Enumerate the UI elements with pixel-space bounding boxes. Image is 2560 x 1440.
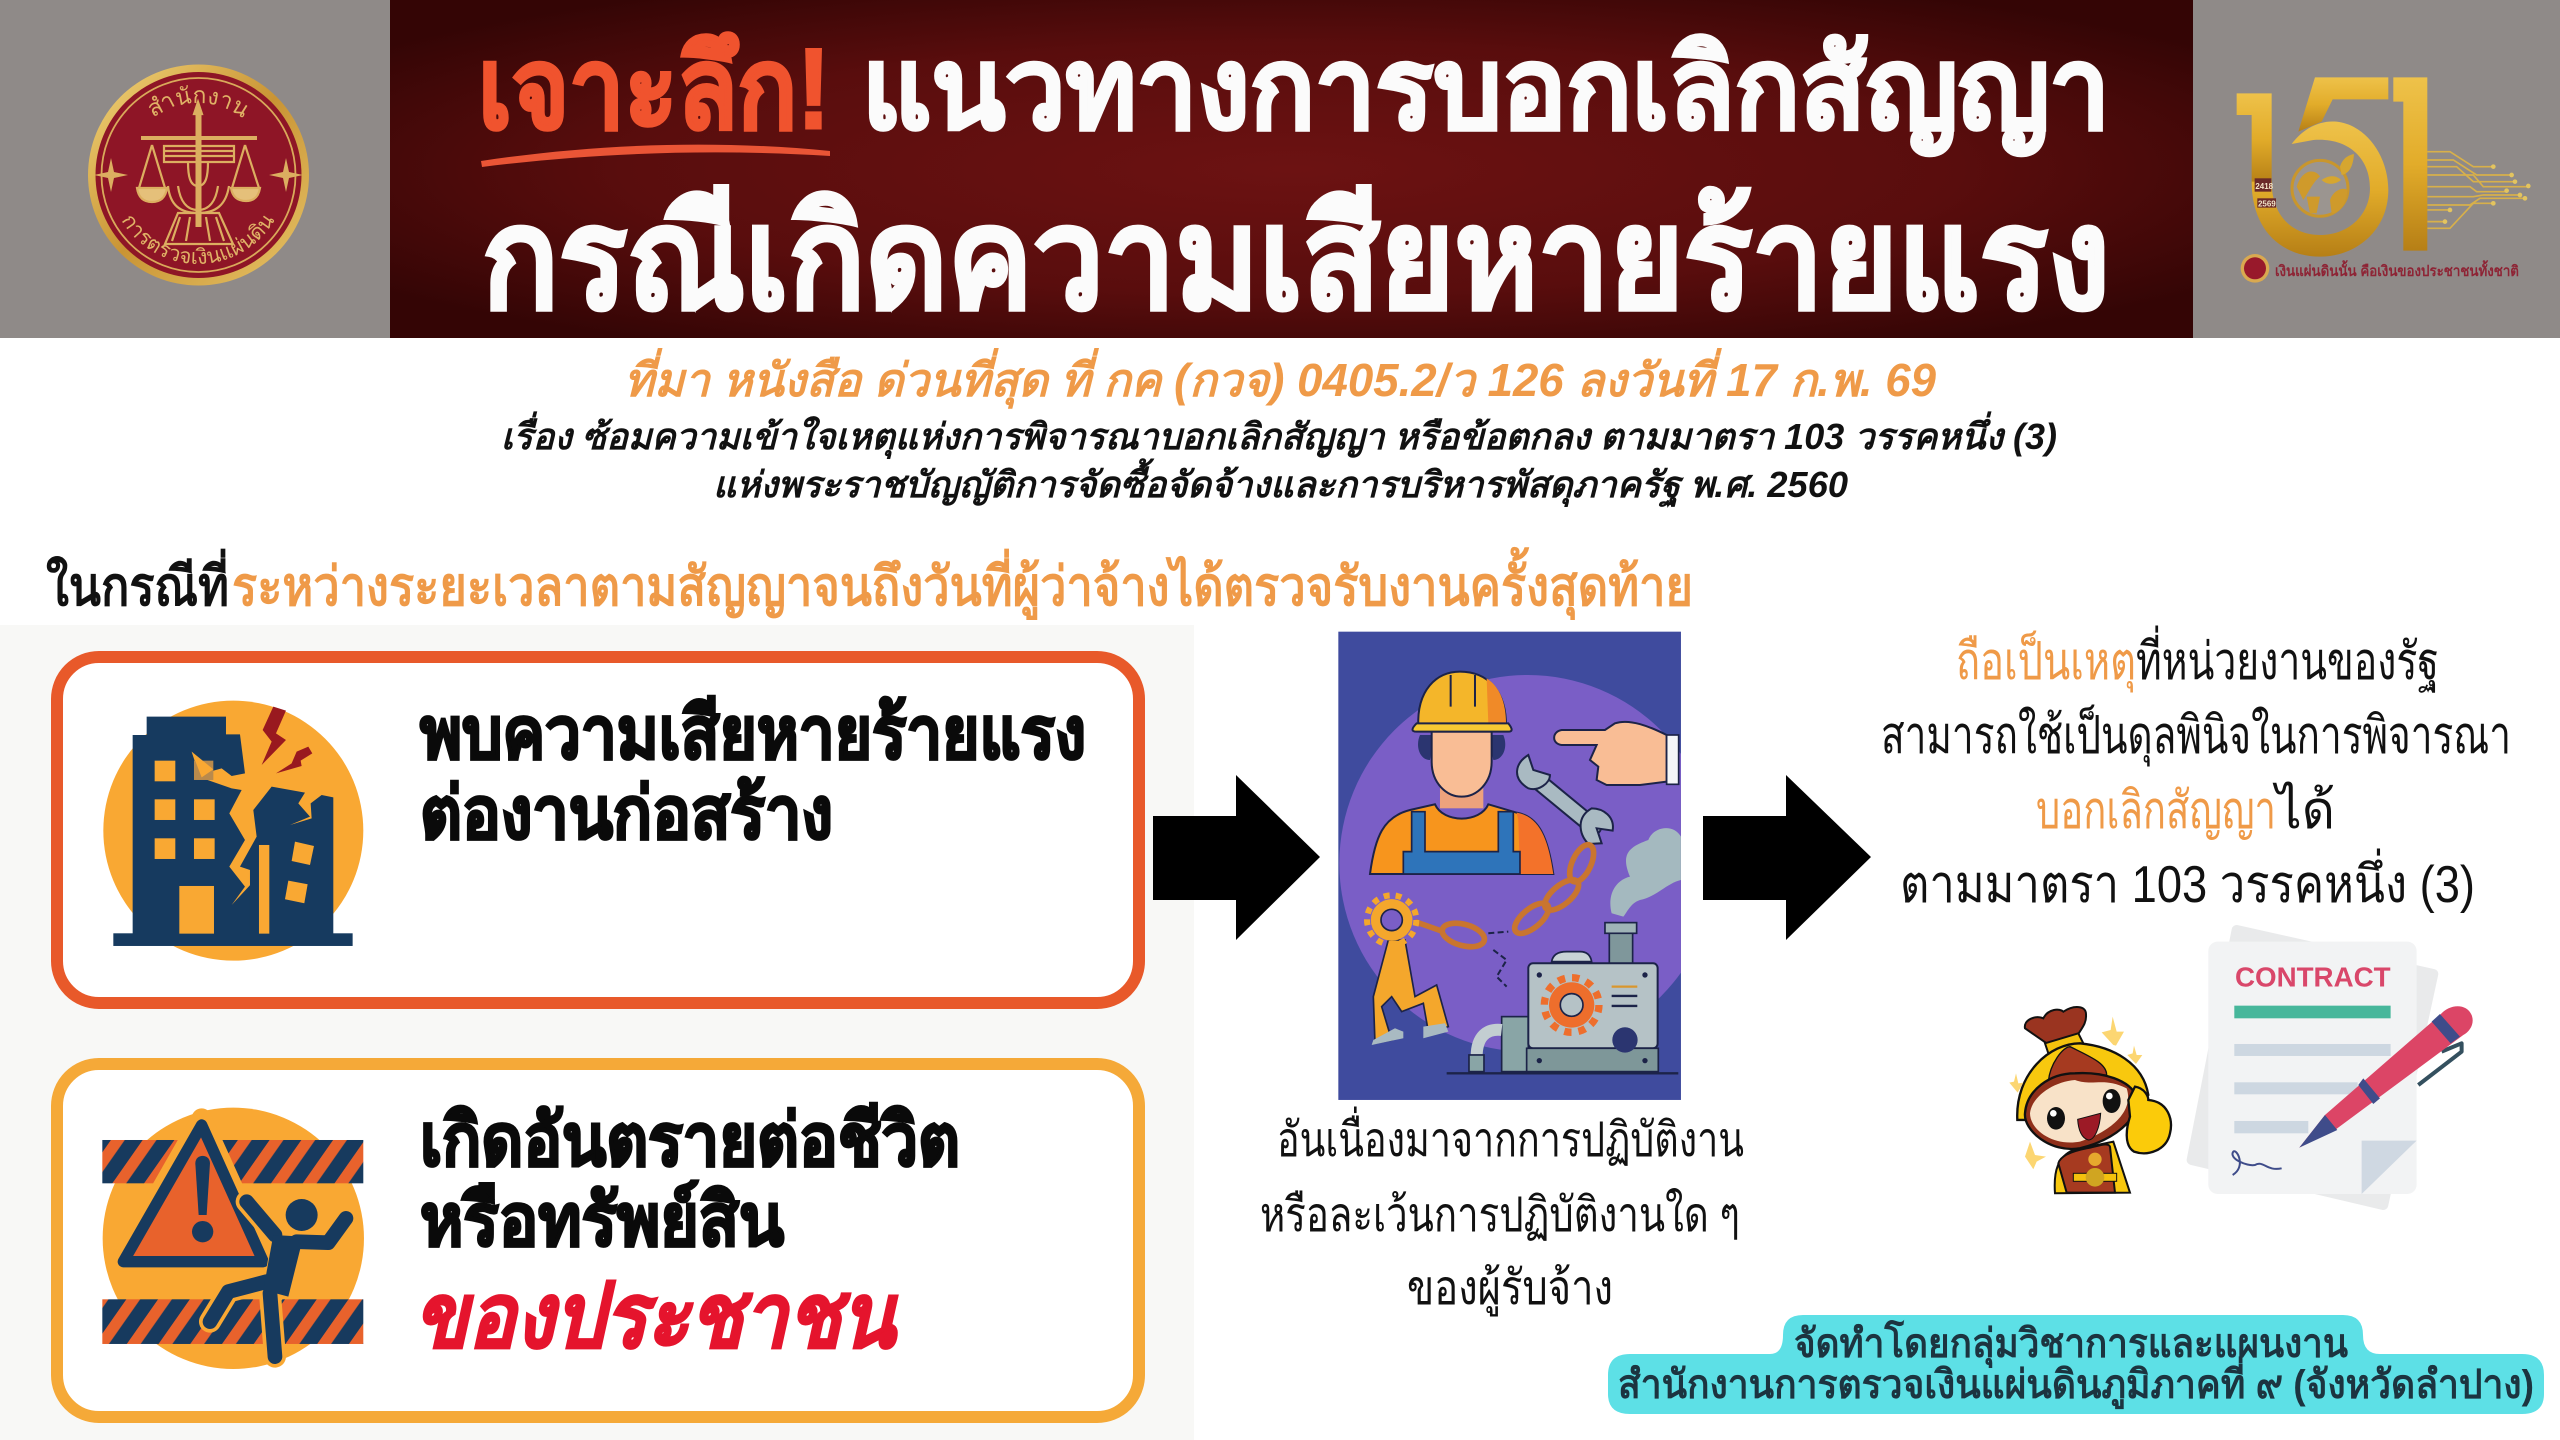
- title underline: [481, 145, 830, 167]
- credit badge: [1608, 1315, 2544, 1414]
- conclusion text: ที่หน่วยงานของรัฐ: [2136, 625, 2439, 692]
- credit badge: จัดทำโดยกลุ่มวิชาการและแผนงาน: [1794, 1320, 2348, 1369]
- panel: serious construction damage: [57, 657, 1139, 1003]
- caption under illustration: อันเนื่องมาจากการปฏิบัติงาน: [1277, 1106, 1744, 1167]
- condition heading: [46, 547, 1693, 621]
- hand: [1554, 722, 1667, 785]
- logo: 151 years anniversary: 2418: [2255, 182, 2274, 191]
- title line 1: เจาะลึก!: [478, 26, 830, 153]
- logo: 151 years anniversary: [2237, 77, 2531, 283]
- subject text: เรื่อง ซ้อมความเข้าใจเหตุแห่งการพิจารณาบอกเลิกสัญญา หรือข้อตกลง ตามมาตรา 103 วรรคหนึ่ง (3): [501, 411, 2057, 459]
- wrench: [1537, 780, 1593, 827]
- heading: danger to life or property: ของประชาชน: [414, 1267, 898, 1367]
- logo: audit office seal: สำนักงาน: [148, 85, 248, 118]
- subject text: แห่งพระราชบัญญัติการจัดซื้อจัดจ้างและการบริหารพัสดุภาครัฐ พ.ศ. 2560: [713, 458, 1848, 508]
- icon: contract and pen: CONTRACT: [2235, 962, 2391, 993]
- caption under illustration: [1260, 1106, 1744, 1317]
- heading: danger to life or property: [414, 1101, 960, 1367]
- logo: 151 years anniversary: 2569: [2258, 200, 2276, 209]
- icon: mascot: [2009, 1007, 2171, 1193]
- icon: cracked building: [103, 701, 363, 961]
- logo: audit office seal: การตรวจเงินแผ่นดิน: [122, 216, 274, 264]
- conclusion text: ตามมาตรา 103 วรรคหนึ่ง (3): [1900, 848, 2475, 914]
- heading: serious damage: [420, 694, 1086, 854]
- title line 1: แนวทางการบอกเลิกสัญญา: [862, 26, 2110, 157]
- caption under illustration: ของผู้รับจ้าง: [1407, 1262, 1613, 1317]
- icon: contract and pen: [2192, 930, 2473, 1205]
- smoke: [1610, 828, 1681, 917]
- title line 2: กรณีเกิดความเสียหายร้ายแรง: [482, 180, 2110, 339]
- caption under illustration: หรือละเว้นการปฏิบัติงานใด ๆ: [1260, 1187, 1740, 1242]
- heading: danger to life or property: หรือทรัพย์สิน: [420, 1180, 784, 1261]
- machine: [1552, 952, 1592, 962]
- condition heading: ในกรณีที่: [46, 548, 229, 617]
- arrow to illustration: [1153, 775, 1320, 940]
- logo: audit office seal: [88, 64, 309, 286]
- header band: [0, 0, 2560, 338]
- conclusion text: [1881, 625, 2511, 914]
- left panel background: [0, 625, 1194, 1440]
- subject text: [501, 411, 2057, 508]
- logo: 151 years anniversary: เงินแผ่นดินนั้น คือเงินของประชาชนทั้งชาติ: [2275, 260, 2519, 280]
- illustration: worker, broken chain and machine: [1338, 632, 1716, 1100]
- heading: danger to life or property: เกิดอันตรายต่อชีวิต: [420, 1101, 960, 1181]
- conclusion text: ได้: [2272, 781, 2335, 840]
- condition heading: ระหว่างระยะเวลาตามสัญญาจนถึงวันที่ผู้ว่าจ้างได้ตรวจรับงานครั้งสุดท้าย: [232, 547, 1693, 621]
- chain: [1415, 841, 1599, 951]
- heading: serious damage: พบความเสียหายร้ายแรง: [420, 694, 1086, 774]
- arrow to conclusion: [1703, 775, 1871, 940]
- conclusion text: ถือเป็นเหตุ: [1956, 631, 2136, 693]
- panel: danger to public life or property: [57, 1064, 1139, 1417]
- source reference line: ที่มา หนังสือ ด่วนที่สุด ที่ กค (กวจ) 0405.2/ว 126 ลงวันที่ 17 ก.พ. 69: [624, 347, 1936, 409]
- icon: warning triangle and falling person: [102, 1108, 364, 1369]
- robot arm: [1373, 940, 1448, 1043]
- heading: serious damage: ต่องานก่อสร้าง: [420, 774, 833, 854]
- conclusion text: บอกเลิกสัญญา: [2036, 782, 2276, 840]
